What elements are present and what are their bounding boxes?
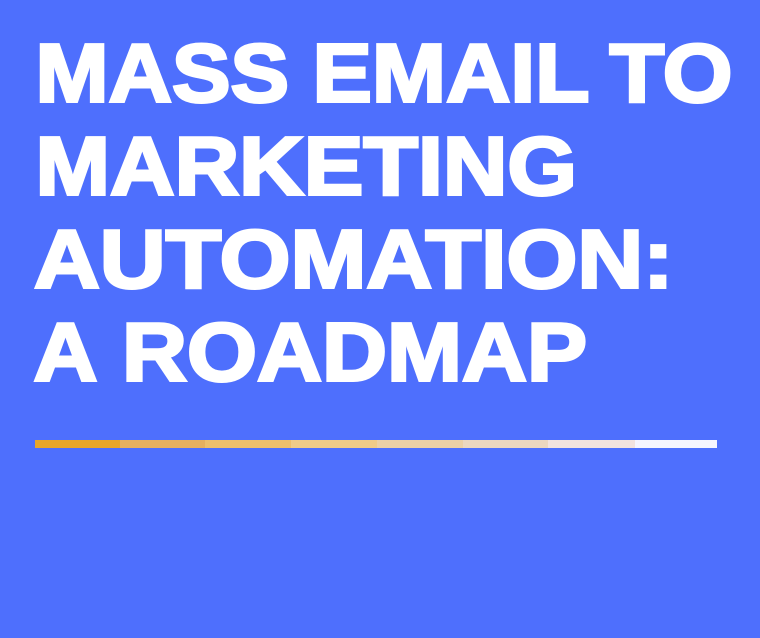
- title: AUTOMATION:: [34, 212, 674, 306]
- title: EMAIL: [312, 26, 590, 120]
- title: A: [34, 306, 98, 398]
- title: MASS: [36, 26, 289, 120]
- gradient divider bar: [35, 440, 717, 448]
- title: ROADMAP: [122, 306, 587, 398]
- title: MARKETING: [36, 120, 577, 212]
- title: [34, 26, 732, 398]
- title: TO: [610, 26, 732, 120]
